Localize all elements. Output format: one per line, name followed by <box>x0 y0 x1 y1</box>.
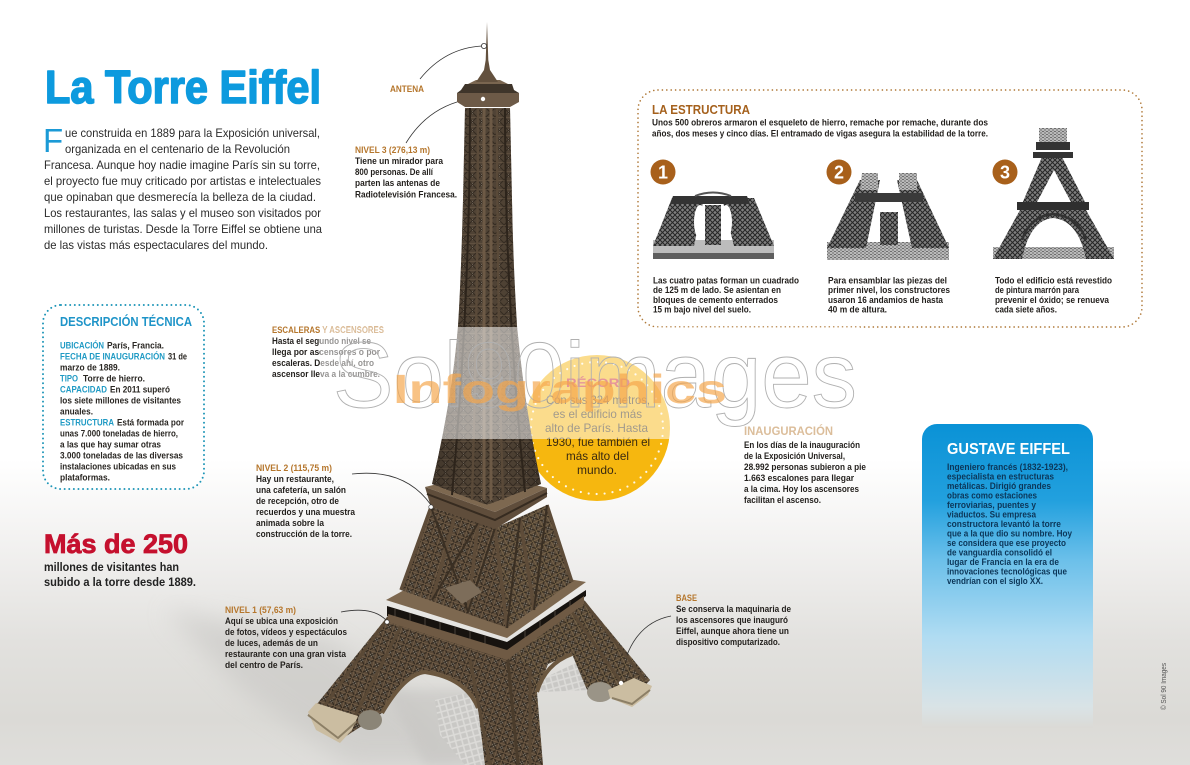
panel: descripción técnica: instalaciones ubicadas en sus <box>60 462 176 472</box>
callout: escaleras y ascensores: llega por ascensores o por <box>272 347 380 357</box>
callout: nivel 3: Tiene un mirador para <box>355 156 444 166</box>
callout: base: BASE <box>676 593 697 604</box>
left foot <box>308 703 382 743</box>
callout: nivel 3: Radiotelevisión Francesa. <box>355 190 457 200</box>
step 1 caption: bloques de cemento enterrados <box>653 295 778 305</box>
left leg and front leg <box>308 616 543 765</box>
biography text: se considera que ese proyecto <box>947 538 1066 548</box>
callout: base: dispositivo computarizado. <box>676 637 780 647</box>
biography text: innovaciones tecnológicas que <box>947 566 1067 576</box>
illustration: Eiffel tower <box>308 22 652 765</box>
panel: descripción técnica: plataformas. <box>60 472 110 482</box>
second level deck <box>425 472 547 529</box>
callout: antena: ANTENA <box>390 84 424 95</box>
callout: nivel 3: NIVEL 3 (276,13 m) <box>355 145 430 156</box>
callout: nivel 1: de fotos, vídeos y espectáculos <box>225 627 347 637</box>
upper shaft <box>432 108 541 505</box>
step 1 badge: 1 <box>658 162 668 182</box>
intro text block: millones de turistas. Desde la Torre Eiffel se obtiene una <box>44 223 323 236</box>
callout: nivel 1 <box>225 605 347 670</box>
callout: escaleras y ascensores: escaleras. Desde ahí, otro <box>272 358 374 368</box>
intro text block: el proyecto fue muy criticado por artistas e intelectuales <box>44 175 321 188</box>
step 1 caption <box>653 276 799 314</box>
biography text: metálicas. Dirigió grandes <box>947 481 1051 491</box>
step 3 caption: prevenir el óxido; se renueva <box>995 295 1110 305</box>
panel: descripción técnica: marzo de 1889. <box>60 362 120 372</box>
panel: descripción técnica: Está formada por <box>117 418 184 428</box>
record circle: 1930, fue también el <box>546 435 650 449</box>
step 3 caption: cada siete años. <box>995 304 1057 314</box>
record circle <box>524 355 670 501</box>
panel: descripción técnica: CAPACIDAD <box>60 384 107 394</box>
panel heading: LA ESTRUCTURA <box>652 102 751 117</box>
record circle: RÉCORD <box>566 375 630 390</box>
intro text block: Los restaurantes, las salas y el museo son visitados por <box>44 207 321 220</box>
callout: nivel 3: parten las antenas de <box>355 178 440 188</box>
callout: nivel 3 <box>355 145 457 200</box>
callout: nivel 2: Hay un restaurante, <box>256 474 334 484</box>
callout: inauguración: En los días de la inauguración <box>744 440 860 450</box>
step 1 badge <box>650 160 676 184</box>
callout: nivel 2: construcción de la torre. <box>256 529 352 539</box>
intro text: años, dos meses y cinco días. El entramado de vigas asegura la estabilidad de la torre. <box>652 128 988 138</box>
intro text block: organizada en el centenario de la Revolución <box>65 143 290 156</box>
top platform <box>457 80 519 107</box>
callout: nivel 2: recuerdos y una muestra <box>256 507 356 517</box>
callout: nivel 2: animada sobre la <box>256 518 325 528</box>
panel: descripción técnica: FECHA DE INAUGURACIÓN <box>60 350 165 362</box>
panel: gustave eiffel <box>922 424 1093 728</box>
record circle: más alto del <box>566 449 629 463</box>
panel: descripción técnica: UBICACIÓN <box>60 340 104 350</box>
step 2 caption: usaron 16 andamios de hasta <box>828 295 944 305</box>
panel: descripción técnica: a las que hay sumar otras <box>60 440 161 450</box>
step 1 caption: Las cuatro patas forman un cuadrado <box>653 276 799 286</box>
callout: escaleras y ascensores: Hasta el segundo nivel se <box>272 336 371 346</box>
watermark: Sol90images <box>333 323 857 427</box>
step 3 caption <box>995 276 1112 314</box>
intro text block: que opinaban que desmerecía la belleza de la ciudad. <box>44 191 316 204</box>
callout: inauguración: facilitan el ascenso. <box>744 495 821 505</box>
drop cap: F <box>43 122 63 159</box>
panel: descripción técnica: TIPO <box>60 374 78 384</box>
panel heading: DESCRIPCIÓN TÉCNICA <box>60 314 193 329</box>
middle section between levels <box>401 505 572 628</box>
panel: descripción técnica: 3.000 toneladas de las diversas <box>60 450 183 460</box>
callout: escaleras y ascensores: ascensor lleva a la cumbre. <box>272 369 380 379</box>
callout: escaleras y ascensores <box>272 325 384 379</box>
callout: nivel 1: NIVEL 1 (57,63 m) <box>225 605 296 616</box>
callout: nivel 1: de luces, además de un <box>225 638 318 648</box>
stat: más de 250: subido a la torre desde 1889. <box>44 575 196 589</box>
step 2 caption: primer nivel, los constructores <box>828 285 950 295</box>
panel: descripción técnica: París, Francia. <box>107 340 164 350</box>
stat: más de 250 <box>44 529 196 589</box>
panel: descripción técnica: anuales. <box>60 406 93 416</box>
panel: descripción técnica: Torre de hierro. <box>83 374 145 384</box>
step 1 caption: de 125 m de lado. Se asientan en <box>653 285 781 295</box>
callout: base: Se conserva la maquinaria de <box>676 604 791 614</box>
callout: inauguración: INAUGURACIÓN <box>744 423 833 438</box>
callout: nivel 1: del centro de París. <box>225 660 303 670</box>
biography text: ferroviarias, puentes y <box>947 500 1036 510</box>
record circle: mundo. <box>577 463 617 477</box>
step 1 engraving <box>653 192 774 259</box>
callout: nivel 2 <box>256 463 356 539</box>
intro text block: ue construida en 1889 para la Exposición universal, <box>65 127 320 140</box>
record circle: alto de París. Hasta <box>545 421 648 435</box>
step 2 engraving <box>827 173 949 260</box>
panel: descripción técnica <box>43 305 204 489</box>
first level deck <box>386 560 586 660</box>
record circle: es el edificio más <box>553 407 642 421</box>
step 2 caption <box>828 276 950 314</box>
right leg <box>505 600 650 765</box>
biography text: especialista en estructuras <box>947 472 1054 482</box>
panel: la estructura <box>638 90 1142 327</box>
step 1 caption: 15 m bajo nivel del suelo. <box>653 304 751 314</box>
step 2 badge: 2 <box>834 162 844 182</box>
biography text: que a la que dio su nombre. Hoy <box>947 528 1072 538</box>
step 3 badge <box>992 160 1018 184</box>
step 3 badge: 3 <box>1000 162 1010 182</box>
callout: inauguración: a la cima. Hoy los ascensores <box>744 484 859 494</box>
callout: inauguración <box>744 423 866 505</box>
panel: descripción técnica: En 2011 superó <box>110 384 170 394</box>
stat: más de 250: millones de visitantes han <box>44 560 179 574</box>
step 3 caption: de pintura marrón para <box>995 285 1080 295</box>
intro text: Unos 500 obreros armaron el esqueleto de hierro, remache por remache, durante dos <box>652 118 988 128</box>
callout: base: los ascensores que inauguró <box>676 615 788 625</box>
watermark: Infographics <box>393 366 727 412</box>
callout: nivel 1: restaurante con una gran vista <box>225 649 347 659</box>
intro text block <box>43 122 323 252</box>
panel: descripción técnica: unas 7.000 toneladas de hierro, <box>60 428 178 438</box>
callout: nivel 2: NIVEL 2 (115,75 m) <box>256 463 332 474</box>
callout: inauguración: 28.992 personas subieron a pie <box>744 462 866 472</box>
biography text <box>947 462 1072 586</box>
panel: descripción técnica: ESTRUCTURA <box>60 418 114 428</box>
step 2 caption: Para ensamblar las piezas del <box>828 276 947 286</box>
callout: escaleras y ascensores: ESCALERAS Y ASCENSORES <box>272 325 384 336</box>
step 2 badge <box>826 160 852 184</box>
biography text: de vanguardia consolidó el <box>947 548 1052 558</box>
biography text: obras como estaciones <box>947 490 1037 500</box>
intro text block: de las vistas más espectaculares del mundo. <box>44 239 268 252</box>
title: La Torre Eiffel <box>45 61 321 113</box>
antenna <box>476 22 498 82</box>
panel: descripción técnica: 31 de <box>168 352 187 362</box>
callout: inauguración: de la Exposición Universal, <box>744 451 845 461</box>
biography text: viaductos. Su empresa <box>947 510 1037 520</box>
callout: nivel 1: Aquí se ubica una exposición <box>225 616 338 626</box>
intro text block: Francesa. Aunque hoy nadie imagine París sin su torre, <box>44 159 320 172</box>
panel: descripción técnica: los siete millones de visitantes <box>60 396 181 406</box>
biography text: lugar de Francia en la era de <box>947 557 1059 567</box>
callout: base: Eiffel, aunque ahora tiene un <box>676 626 789 636</box>
biography text: vendrían con el siglo XX. <box>947 576 1043 586</box>
leader lines and callouts <box>341 43 671 685</box>
callout: nivel 2: una cafetería, un salón <box>256 485 346 495</box>
stat: más de 250: Más de 250 <box>44 529 188 559</box>
panel heading: GUSTAVE EIFFEL <box>947 441 1070 458</box>
step 3 caption: Todo el edificio está revestido <box>995 276 1112 286</box>
callout: base <box>676 593 791 647</box>
callout: nivel 2: de recepción, otro de <box>256 496 339 506</box>
step 2 caption: 40 m de altura. <box>828 304 887 314</box>
callout: inauguración: 1.663 escalones para llegar <box>744 473 854 483</box>
shadow of the tower on the ground <box>165 610 590 765</box>
copyright: © Sol 90 Images <box>1160 663 1168 710</box>
biography text: Ingeniero francés (1832-1923), <box>947 462 1068 472</box>
biography text: constructora levantó la torre <box>947 519 1061 529</box>
record circle: Con sus 324 metros, <box>546 393 650 407</box>
right foot <box>587 678 652 707</box>
intro text <box>652 118 988 138</box>
step 3 engraving <box>993 128 1114 259</box>
callout: nivel 3: 800 personas. De allí <box>355 167 433 177</box>
